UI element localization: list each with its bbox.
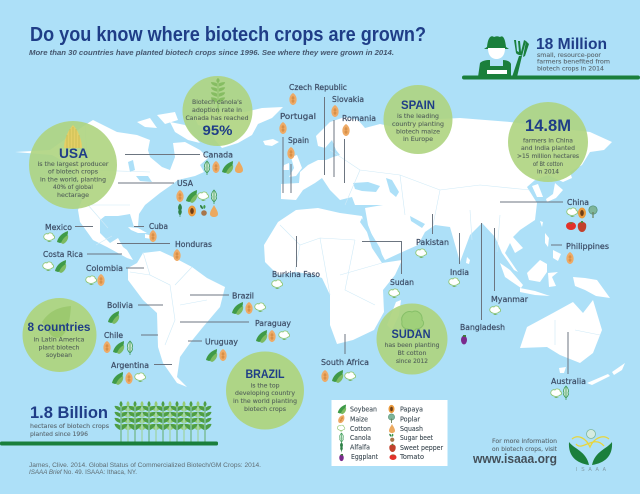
callout: Spain: biotech maize [396, 128, 440, 136]
country label: Chile [103, 330, 158, 355]
country label: Colombia [86, 263, 144, 286]
country label: Uruguay: Uruguay [205, 336, 238, 346]
country label: Slovakia [331, 94, 364, 177]
country label: India: India [450, 267, 469, 277]
callout: 8 countries [22, 298, 96, 372]
country label: Paraguay: Paraguay [255, 318, 291, 328]
country label: Cuba: Cuba [149, 221, 168, 231]
callout: farmers 18 million: farmers benefited from [537, 58, 610, 66]
Greenland [195, 107, 283, 148]
callout: Sudan [376, 304, 448, 374]
country label: Mexico [44, 222, 93, 244]
country label: Mexico: Mexico [45, 222, 72, 232]
North America [15, 120, 208, 260]
country label: Honduras [117, 239, 212, 261]
country label: Czech Republic [289, 82, 347, 175]
callout: 14.8M farmers: and India planted [521, 144, 575, 152]
Sri Lanka [466, 257, 470, 264]
callout: farmers 18 million [462, 36, 640, 80]
country label: Myanmar: Myanmar [491, 294, 529, 304]
country label: Philippines [551, 241, 609, 264]
Arctic islands [137, 112, 200, 143]
callout: 8 countries: in Latin America [34, 336, 85, 344]
legend: Tomato [399, 453, 424, 461]
country label: Bangladesh [460, 223, 505, 344]
legend: Sweet pepper [400, 444, 443, 452]
callout: Spain: SPAIN [401, 100, 435, 112]
Iceland [263, 139, 279, 146]
citation: ISAAA Brief No. 49. ISAAA: Ithaca, NY. [29, 469, 137, 476]
country label: Costa Rica: Costa Rica [43, 249, 83, 259]
legend: Alfalfa [350, 444, 370, 452]
callout: Sudan: has been planting [384, 341, 440, 349]
callout: USA: is the largest producer [38, 160, 109, 168]
legend: Canola [350, 434, 371, 442]
legend: Soybean [350, 406, 377, 414]
callout: Sudan: Bt cotton [398, 349, 426, 357]
callout: farmers 18 million: small, resource-poor [537, 51, 601, 59]
country label: South Africa: South Africa [321, 357, 369, 367]
Australia [520, 300, 602, 363]
callout: 8 countries: soybean [46, 351, 72, 359]
callout: canola [182, 76, 252, 146]
country label: Canada: Canada [203, 150, 233, 160]
country label: Colombia: Colombia [86, 263, 123, 273]
country label: Honduras: Honduras [175, 239, 212, 249]
country label: Bolivia: Bolivia [107, 300, 133, 310]
more information text: on biotech crops, visit [492, 445, 557, 453]
British Isles [283, 155, 302, 177]
Philippines, Taiwan [540, 221, 561, 261]
country label: Argentina [111, 360, 172, 385]
Cuba, Hispaniola [128, 227, 153, 239]
icon: cotton boll [402, 311, 424, 333]
Eurasia [281, 117, 612, 272]
South America [128, 251, 225, 387]
callout: Brazil: biotech crops [244, 405, 287, 413]
callout: 14.8M farmers: >15 million hectares [517, 152, 580, 160]
citation [29, 462, 261, 476]
country label: Slovakia: Slovakia [332, 94, 364, 104]
legend: Poplar [400, 416, 420, 424]
country label: Australia [551, 332, 586, 400]
icon: canola leaf [211, 78, 225, 114]
callout: 14.8M farmers: in 2014 [537, 168, 559, 176]
country label: Uruguay [188, 336, 238, 362]
country label: Spain: Spain [288, 135, 309, 145]
callout: 8 countries: plant biotech [38, 344, 80, 352]
callout: 14.8M farmers: of Bt cotton [533, 160, 563, 168]
icon: corn [64, 125, 82, 148]
callout: 1.8 billion hectares: 1.8 Billion [30, 404, 108, 422]
callout: 8 countries: 8 countries [28, 322, 90, 334]
callout: canola: Biotech canola's [192, 98, 243, 106]
callout: USA: 40% of global [53, 183, 93, 191]
callout: USA: in the world, planting [40, 176, 106, 184]
country label: Australia: Australia [551, 376, 586, 386]
callout: Sudan: SUDAN [392, 329, 430, 341]
country label: Chile: Chile [104, 330, 123, 340]
country label: Sudan [362, 242, 414, 298]
callout: 1.8 billion hectares: planted since 1996 [30, 430, 88, 438]
callout: Sudan: since 2012 [396, 357, 428, 365]
country label: USA: USA [177, 178, 193, 188]
more information text: For more information [492, 437, 557, 445]
callout: USA: hectarage [57, 191, 89, 199]
country label: Paraguay [180, 318, 291, 343]
callout: Spain [384, 85, 452, 154]
callout: canola: Canada has reached [186, 114, 248, 122]
country label: Bangladesh: Bangladesh [460, 322, 505, 332]
country label: Burkina Faso: Burkina Faso [272, 269, 320, 279]
callout: Brazil: is the top [250, 382, 280, 390]
country label: Romania [342, 113, 376, 183]
bar [0, 442, 218, 446]
country label: Philippines: Philippines [566, 241, 609, 251]
callout: 14.8M farmers [508, 102, 588, 182]
country label: Brazil: Brazil [232, 290, 254, 300]
country label: Pakistan: Pakistan [416, 237, 449, 247]
callout: farmers 18 million: 18 Million [536, 36, 607, 53]
country label: Portugal: Portugal [280, 111, 316, 121]
country label: Pakistan [416, 214, 449, 258]
callout: USA: of biotech crops [48, 168, 99, 176]
country borders [85, 125, 600, 345]
country label: Brazil [190, 290, 266, 315]
callout: Spain: is the leading [397, 112, 439, 120]
country label: Romania: Romania [342, 113, 376, 123]
country label: Burkina Faso [272, 236, 320, 289]
icon: soybean pod [42, 306, 71, 338]
country label: Sudan: Sudan [390, 277, 414, 287]
country label: Portugal [279, 111, 316, 193]
Madagascar [387, 300, 401, 330]
Japan [546, 183, 563, 202]
legend: Sugar beet [400, 434, 433, 442]
logo: ISAAA [569, 430, 612, 473]
icon: wheat field [114, 401, 212, 443]
country label: India [449, 233, 469, 287]
country label: Bolivia [107, 300, 163, 324]
Africa [264, 208, 402, 344]
country label: Canada [125, 150, 243, 175]
country label: China: China [567, 197, 589, 207]
country label: China [500, 197, 597, 232]
callout: Brazil: BRAZIL [246, 369, 284, 381]
Tasmania, New Zealand [559, 363, 625, 385]
citation: James, Clive. 2014. Global Status of Commercialized Biotech/GM Crops: 2014. [29, 462, 261, 469]
Korea [532, 184, 543, 197]
legend: Papaya [400, 406, 423, 414]
callout: Spain: country planting [392, 120, 444, 128]
more information text [472, 437, 557, 466]
country label: South Africa [321, 334, 369, 383]
bar [462, 76, 640, 80]
legend: Eggplant [351, 453, 378, 461]
country label: Costa Rica [43, 249, 122, 273]
world map [15, 107, 625, 387]
country label: USA [118, 178, 218, 217]
legend [332, 400, 448, 466]
country label: Myanmar [490, 228, 529, 315]
callout: Brazil [226, 352, 304, 430]
callout: 14.8M farmers: 14.8M [525, 117, 571, 135]
callout: farmers 18 million: biotech crops in 2014 [537, 64, 604, 72]
callout: USA [29, 121, 117, 209]
country label: Spain [287, 135, 309, 193]
callout: canola: adoption rate in [192, 106, 242, 114]
callout: USA: USA [59, 146, 88, 161]
callout: canola: 95% [202, 123, 232, 138]
callout: 1.8 billion hectares: hectares of biotech crops [30, 422, 110, 430]
inland waters [128, 160, 425, 258]
country label: Cuba [134, 221, 168, 242]
legend: Squash [400, 425, 423, 433]
callout: Brazil: developing country [235, 389, 295, 397]
legend: Maize [350, 416, 368, 424]
more information text: www.isaaa.org [472, 451, 557, 466]
country label: Argentina: Argentina [111, 360, 149, 370]
callout: Brazil: in the world planting [233, 397, 297, 405]
callout: Spain: in Europe [403, 135, 433, 143]
country label: Czech Republic: Czech Republic [289, 82, 347, 92]
callout: 14.8M farmers: farmers in China [523, 136, 573, 144]
logo: ISAAA: ISAAA [576, 467, 607, 473]
title: Do you know where biotech crops are grown? [30, 24, 426, 46]
icon: farmer with pitchfork [478, 36, 529, 77]
subtitle: More than 30 countries have planted biotech crops since 1996. See where they were grown in 2014. [29, 48, 394, 57]
callout: 1.8 billion hectares [0, 401, 218, 446]
Indonesia [500, 260, 610, 298]
legend: Cotton [350, 425, 371, 433]
